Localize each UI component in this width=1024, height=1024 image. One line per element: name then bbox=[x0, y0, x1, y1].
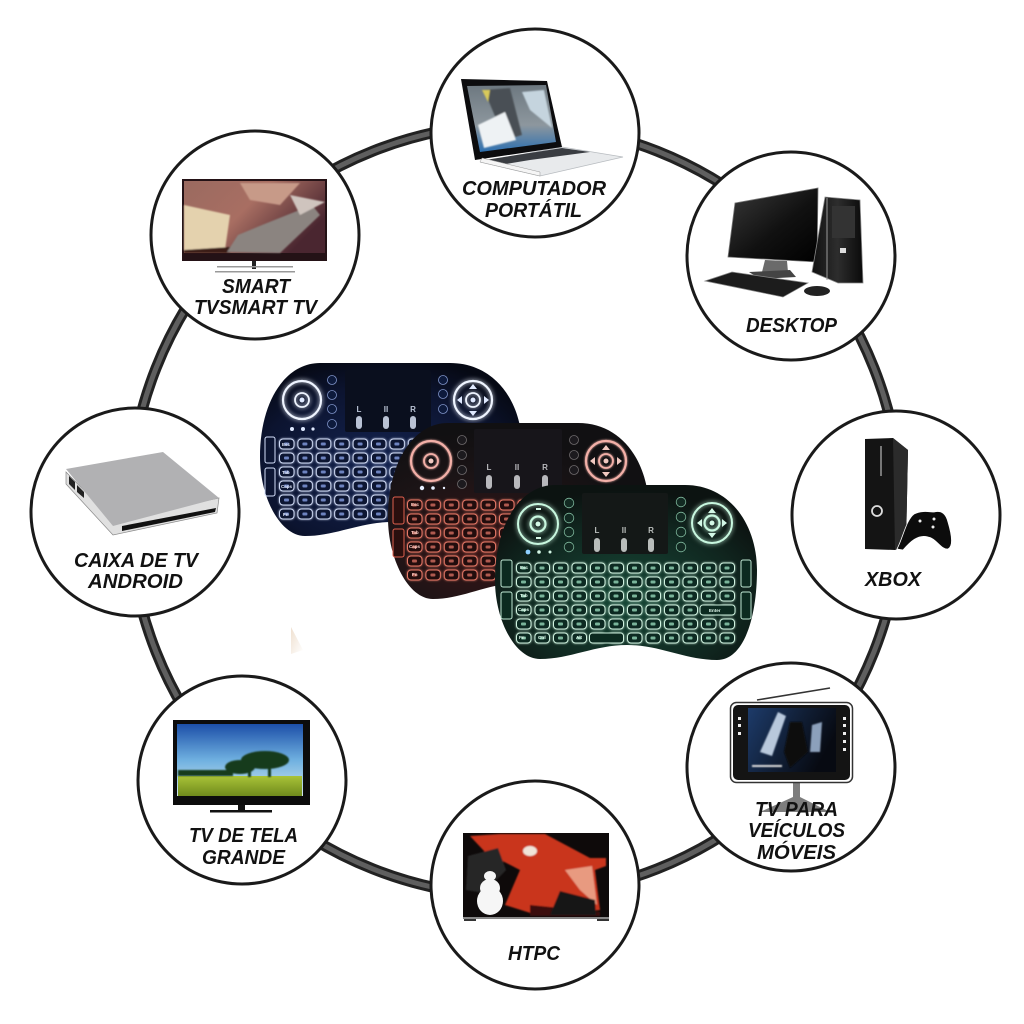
icon: android tv box bbox=[66, 452, 219, 535]
touchpad buttons: R bbox=[648, 526, 654, 535]
label: laptop bbox=[462, 178, 607, 222]
device node: htpc bbox=[431, 781, 639, 989]
touchpad bbox=[582, 493, 668, 554]
label: smart tv bbox=[194, 276, 319, 319]
key grid bbox=[515, 561, 737, 645]
label: xbox: XBOX bbox=[864, 569, 923, 591]
keyboard: red backlight: Caps bbox=[409, 544, 421, 549]
label: vehicle tv: VEÍCULOS bbox=[748, 819, 846, 842]
connecting ring bbox=[129, 124, 901, 896]
label: android box bbox=[74, 550, 200, 593]
keyboard: red backlight bbox=[388, 423, 649, 600]
white robot bbox=[477, 871, 503, 915]
icon: smart tv with ship bbox=[182, 179, 327, 272]
keyboard: blue backlight: Tab bbox=[282, 470, 290, 475]
icon: xbox console and controller bbox=[865, 438, 951, 550]
label: android box: CAIXA DE TV bbox=[74, 550, 200, 572]
keyboard: green backlight bbox=[495, 485, 757, 660]
device node: android box bbox=[31, 408, 239, 616]
keyboard: blue backlight: R bbox=[410, 405, 416, 414]
label: laptop: PORTÁTIL bbox=[485, 199, 582, 222]
keyboard: blue backlight: Esc bbox=[282, 442, 291, 447]
keyboard: red backlight: L bbox=[487, 463, 492, 472]
arrows and status lights bbox=[536, 508, 727, 554]
key legends bbox=[518, 565, 721, 640]
faint image artefact bbox=[291, 627, 303, 654]
keyboard: blue backlight: L bbox=[357, 405, 362, 414]
icon: laptop bbox=[461, 79, 623, 176]
label: smart tv: TVSMART TV bbox=[194, 297, 319, 319]
key legends: Caps bbox=[518, 607, 530, 612]
keyboard: blue backlight bbox=[260, 363, 522, 537]
label: large screen tv bbox=[189, 825, 298, 869]
keyboard: blue backlight: Caps bbox=[281, 484, 293, 489]
icon: flat tv with animated scene bbox=[463, 833, 609, 921]
label: vehicle tv: TV PARA bbox=[755, 799, 838, 821]
side keys bbox=[501, 560, 751, 619]
key legends: Esc bbox=[520, 565, 529, 570]
label: android box: ANDROID bbox=[87, 571, 183, 593]
label: laptop: COMPUTADOR bbox=[462, 178, 607, 200]
icon: portable tv bbox=[730, 688, 852, 812]
keyboard: red backlight: II bbox=[515, 463, 519, 472]
device node: desktop bbox=[687, 152, 895, 360]
device node: vehicle tv bbox=[687, 663, 895, 871]
label: large screen tv: GRANDE bbox=[202, 847, 286, 869]
touchpad buttons: II bbox=[622, 526, 626, 535]
keyboard: red backlight: Tab bbox=[411, 530, 419, 535]
keyboard: blue backlight: Fn bbox=[283, 512, 289, 517]
touchpad buttons bbox=[594, 526, 654, 552]
key legends: Enter bbox=[709, 608, 721, 613]
touchpad buttons: L bbox=[595, 526, 600, 535]
key legends: Fn bbox=[519, 635, 525, 640]
label: smart tv: SMART bbox=[222, 276, 292, 298]
key legends: Tab bbox=[520, 593, 528, 598]
direction dials bbox=[518, 503, 732, 544]
label: htpc: HTPC bbox=[508, 943, 561, 965]
keyboard: red backlight: R bbox=[542, 463, 548, 472]
keyboard: red backlight: Fn bbox=[412, 572, 418, 577]
label: desktop: DESKTOP bbox=[746, 315, 838, 337]
keyboard: red backlight: Esc bbox=[411, 502, 420, 507]
icon: desktop computer bbox=[705, 188, 863, 297]
device node: xbox bbox=[792, 411, 1000, 619]
device node: large screen tv bbox=[138, 676, 346, 884]
device node: laptop bbox=[431, 29, 639, 237]
key legends: Alt bbox=[576, 635, 582, 640]
device node: smart tv bbox=[151, 131, 359, 339]
icon: big tv with landscape bbox=[173, 720, 310, 812]
label: large screen tv: TV DE TELA bbox=[189, 825, 298, 847]
round shortcut buttons bbox=[564, 497, 686, 552]
label: vehicle tv: MÓVEIS bbox=[757, 840, 837, 864]
key legends: Ctrl bbox=[538, 635, 546, 640]
keyboard: blue backlight: II bbox=[384, 405, 388, 414]
label: vehicle tv bbox=[748, 799, 846, 864]
